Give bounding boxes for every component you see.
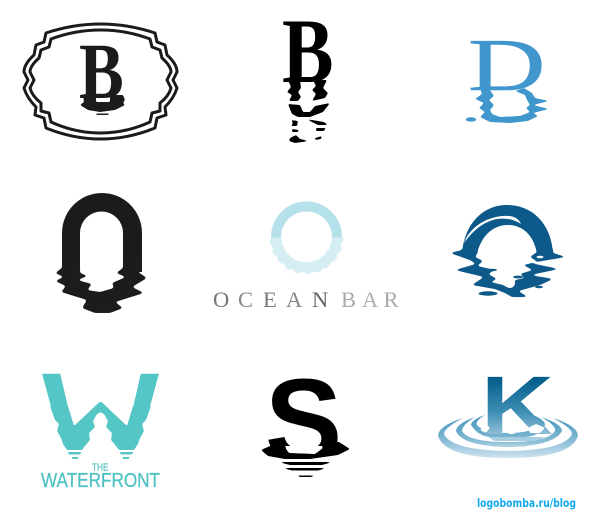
logo: tall B with long reflection [282,1,334,143]
logo: blue letter with reflection [466,24,549,123]
S reflection [261,442,350,477]
K lower reflection [486,437,545,446]
source credit: logobomba.ru/blog [477,496,576,510]
ripple specks [458,256,544,296]
letter W: W [42,349,160,481]
reflection [466,88,549,123]
W left reflection [50,401,101,459]
B reflection [287,80,330,143]
wordmark: A [286,287,303,312]
logo: S with reflection [262,378,349,477]
wordmark: R [384,287,399,312]
letter B: B [282,1,334,103]
ripple rings [438,415,578,458]
B reflection [80,95,125,115]
wordmark: N [312,287,328,312]
wordmark [213,287,399,312]
logo: Ocean Bar [213,206,399,312]
logo: K with ripples [438,376,578,458]
wordmark: B [341,287,356,312]
arch reflection [55,262,147,313]
ring top half [271,202,342,238]
letter S: S [265,354,342,486]
WATERFRONT label: WATERFRONT [41,470,160,492]
arch reflection [450,248,566,297]
THE label: THE [92,462,108,474]
W right reflection [100,401,151,459]
wordmark: E [263,287,277,312]
wordmark: O [213,287,229,312]
W centre cut [66,372,135,426]
ornate double frame [24,24,177,139]
logo: B in ornate frame [24,24,177,139]
K water cut-outs [480,422,545,434]
logo: black arch with reflection [55,193,147,313]
ring reflection [270,238,344,274]
highlight [464,216,521,243]
letter K: K [481,359,554,453]
logo: The Waterfront [41,374,160,488]
logo: blue arch sunset [450,205,566,297]
arch [462,205,553,254]
letter: D [468,24,545,106]
wordmark: A [362,287,379,312]
wordmark: C [238,287,253,312]
arch [62,193,142,272]
letter B: B [79,28,124,115]
